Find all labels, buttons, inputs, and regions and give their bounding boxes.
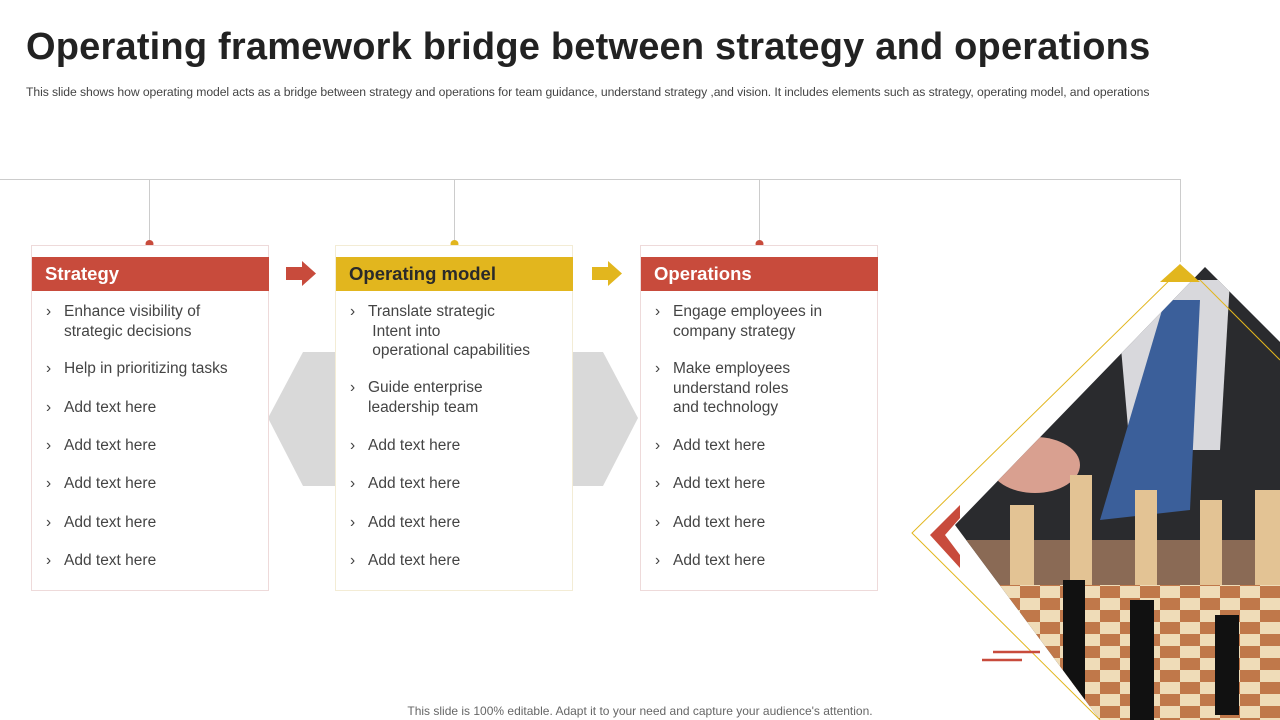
panel: operations: and technology (673, 399, 778, 416)
panel: operations: › (655, 303, 660, 320)
panel: strategy: Help in prioritizing tasks (64, 360, 228, 377)
panel: strategy: › (46, 475, 51, 492)
panel: operations: Make employees (673, 360, 790, 377)
panel: operations: › (655, 475, 660, 492)
panel: operations: › (655, 552, 660, 569)
panel: operations (640, 245, 878, 591)
panel: strategy: Add text here (64, 437, 156, 454)
panel: operating model: › (350, 514, 355, 531)
panel: operating model: › (350, 379, 355, 396)
panel: strategy: › (46, 399, 51, 416)
panel: operations: › (655, 514, 660, 531)
panel: operations: Add text here (673, 552, 765, 569)
arrow: red (286, 261, 316, 286)
panel: strategy: Strategy (45, 263, 119, 284)
panel: strategy: Add text here (64, 552, 156, 569)
panel: operations: Add text here (673, 437, 765, 454)
panel: strategy: › (46, 303, 51, 320)
subtitle: This slide shows how operating model acts as a bridge between strategy and operations for team guidance, understand strategy ,and vision. It includes elements such as strategy, operating model, and operations (26, 85, 1149, 99)
panel: operations: Add text here (673, 475, 765, 492)
panel: operating model: › (350, 303, 355, 320)
image: chess diamond (911, 264, 1280, 720)
panel: operating model: Guide enterprise (368, 379, 483, 396)
panel: operating model: Operating model (349, 263, 496, 284)
panel: strategy: Enhance visibility of (64, 303, 200, 320)
panel: strategy: Add text here (64, 514, 156, 531)
panel: operating model: › (350, 475, 355, 492)
panel: strategy: › (46, 552, 51, 569)
gray bridge arrow left (269, 352, 335, 486)
panel: operations: Operations (654, 263, 752, 284)
panel: operating model (335, 245, 573, 591)
panel: operating model: › (350, 552, 355, 569)
panel: operating model: Translate strategic (368, 303, 495, 320)
panel: operations: company strategy (673, 322, 795, 340)
footer: This slide is 100% editable. Adapt it to your need and capture your audience's attention. (407, 704, 873, 718)
panel: strategy: Add text here (64, 399, 156, 416)
panel: strategy (31, 245, 269, 591)
panel: strategy: Add text here (64, 475, 156, 492)
panel: operating model: Add text here (368, 552, 460, 569)
panel: operations: › (655, 360, 660, 377)
panel: operating model: Add text here (368, 514, 460, 531)
panel: operating model: operational capabilities (372, 342, 530, 359)
gray bridge arrow right (573, 352, 638, 486)
panel: operations: Engage employees in (673, 303, 822, 320)
panel: operating model: Add text here (368, 475, 460, 492)
panel: operating model: Intent into (372, 322, 440, 340)
panel: strategy: › (46, 514, 51, 531)
title: Operating framework bridge between strategy and operations (26, 26, 1150, 68)
panel: strategy: › (46, 360, 51, 377)
panel: operating model: Add text here (368, 437, 460, 454)
panel: strategy: strategic decisions (64, 322, 192, 340)
panel: operations: › (655, 437, 660, 454)
panel: operations: understand roles (673, 380, 788, 396)
panel: operating model: › (350, 437, 355, 454)
panel: operating model: leadership team (368, 398, 478, 416)
panel: operations: Add text here (673, 514, 765, 531)
panel: strategy: › (46, 437, 51, 454)
arrow: yellow (592, 261, 622, 286)
